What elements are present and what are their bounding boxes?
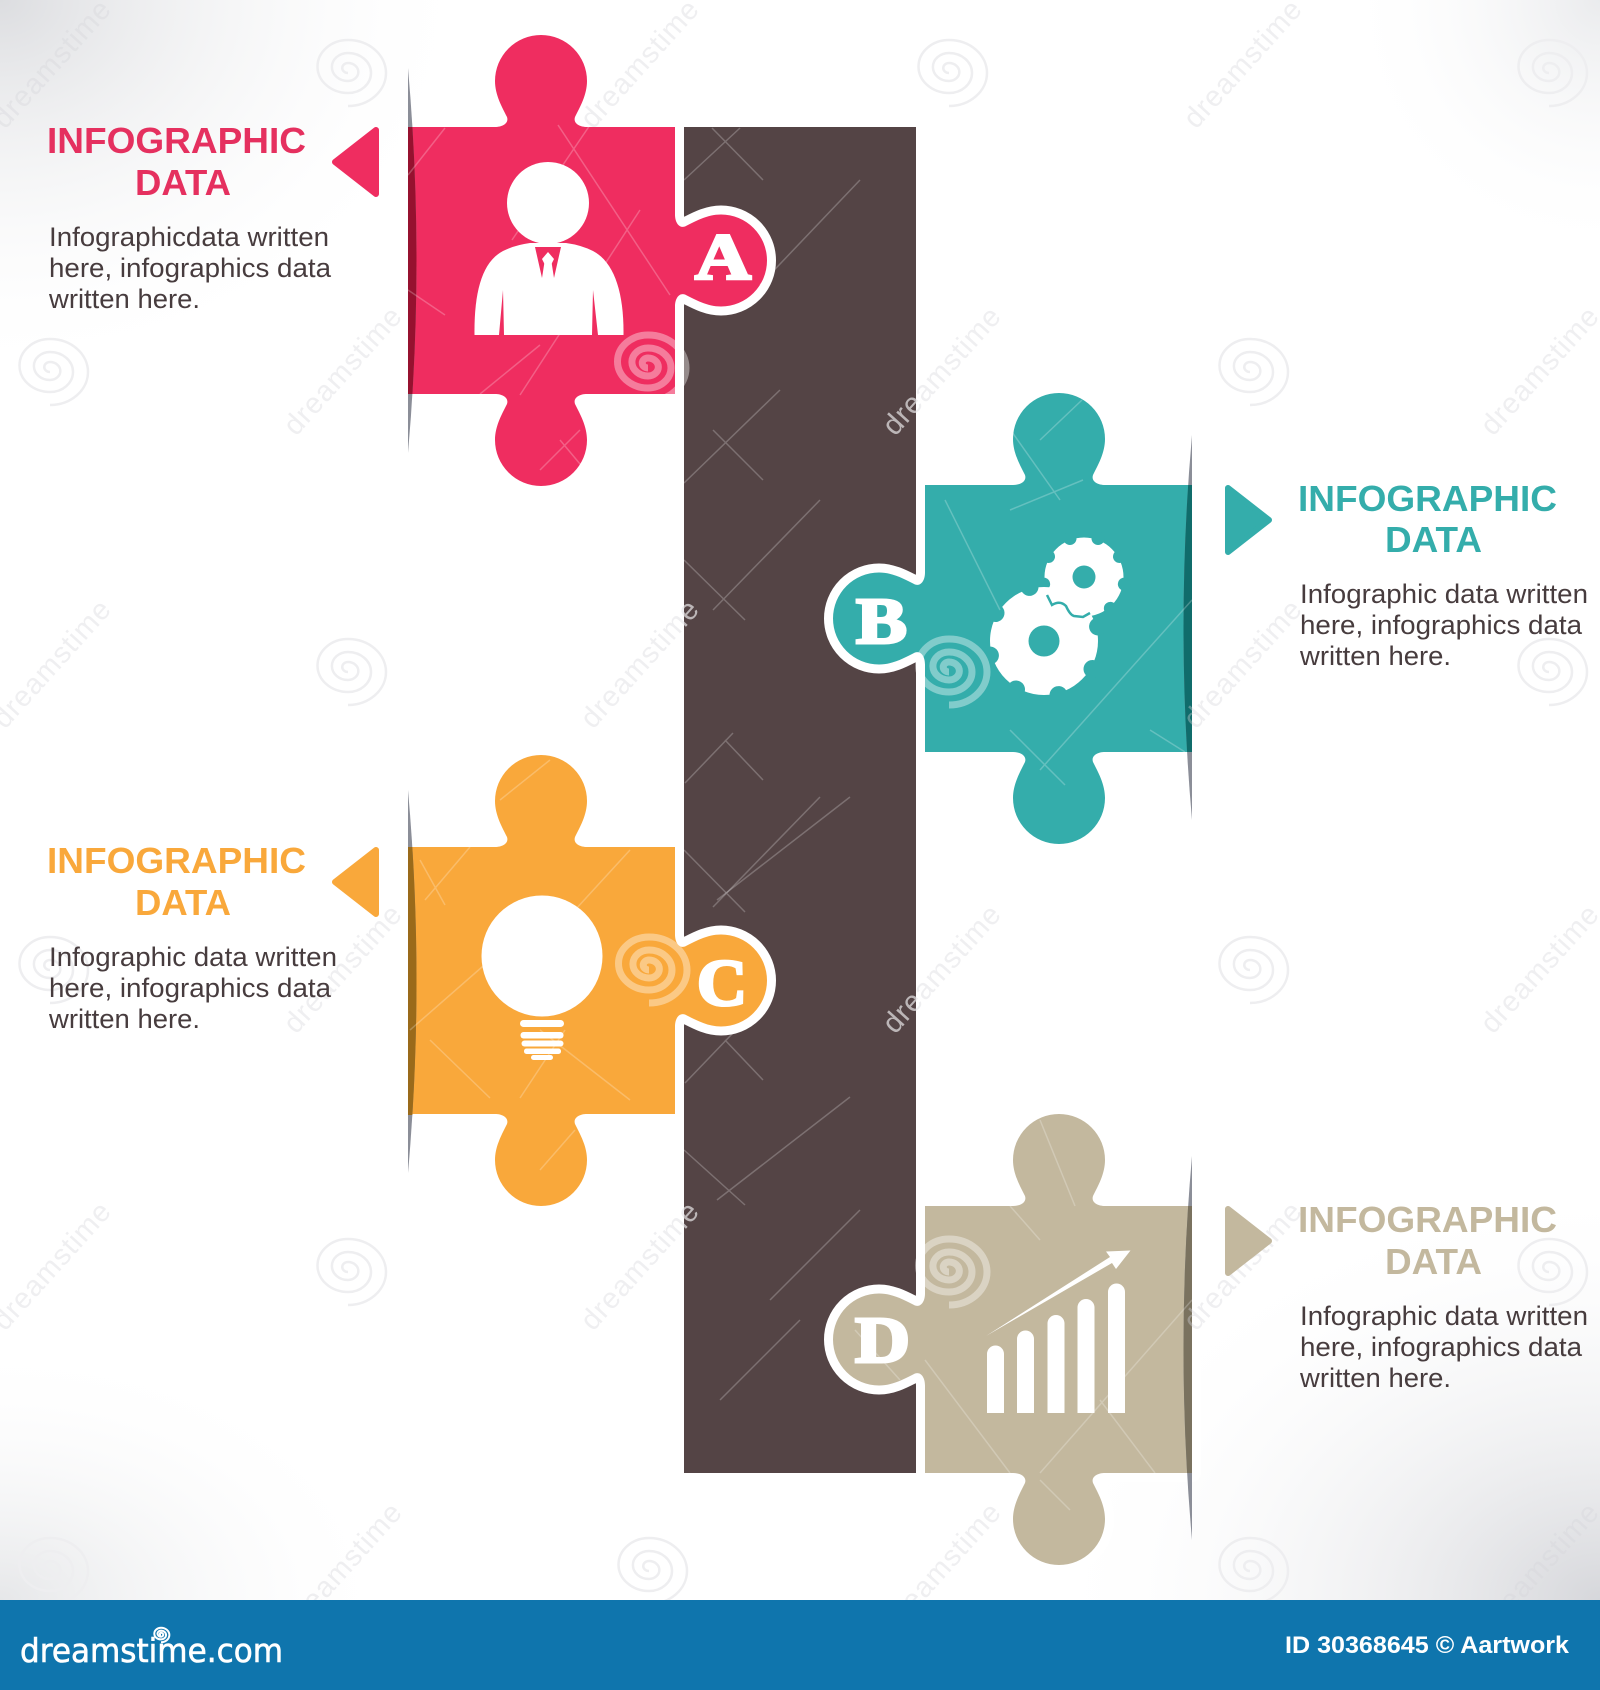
- arrow B: [1228, 488, 1269, 552]
- body C: [48, 942, 337, 1034]
- central brown bar: [684, 127, 916, 1473]
- body C: written here.: [48, 1004, 200, 1034]
- body D: Infographic data written: [1300, 1301, 1588, 1331]
- icon: light bulb: [482, 896, 602, 1060]
- watermark pattern: dreamstime: [876, 300, 1008, 442]
- icon: growth chart: [986, 1250, 1130, 1413]
- panel: piece D: [833, 1114, 1192, 1565]
- fold shadow C: [408, 790, 416, 1173]
- panel: piece B: [833, 393, 1192, 844]
- text block B: [1298, 478, 1588, 671]
- body D: written here.: [1299, 1363, 1451, 1393]
- puzzle piece A: [408, 35, 767, 486]
- body D: here, infographics data: [1300, 1332, 1583, 1362]
- watermark pattern: dreamstime: [277, 300, 409, 442]
- body B: Infographic data written: [1300, 579, 1588, 609]
- puzzle piece D: [833, 1114, 1192, 1565]
- panel: piece C: [408, 755, 767, 1206]
- watermark pattern: dreamstime: [876, 1496, 1008, 1638]
- body B: [1299, 579, 1588, 671]
- body A: Infographicdata written: [49, 222, 329, 252]
- body B: written here.: [1299, 641, 1451, 671]
- letter D: D: [855, 1304, 910, 1377]
- heading D: [1298, 1199, 1557, 1282]
- letter A: A: [695, 221, 751, 294]
- footer band: [0, 1600, 1600, 1690]
- heading C: DATA: [135, 882, 231, 923]
- heading D: DATA: [1385, 1241, 1482, 1282]
- watermark pattern: dreamstime: [876, 898, 1008, 1040]
- footer logo: dreamstime.com: [20, 1631, 283, 1670]
- letter C: C: [697, 947, 747, 1020]
- icon: gears: [979, 530, 1132, 706]
- body C: Infographic data written: [49, 942, 337, 972]
- heading B: DATA: [1385, 519, 1482, 560]
- body A: written here.: [48, 284, 200, 314]
- body B: here, infographics data: [1300, 610, 1583, 640]
- watermark pattern: dreamstime: [574, 593, 706, 735]
- text block A: [47, 120, 332, 314]
- heading A: INFOGRAPHIC: [47, 120, 306, 161]
- watermark pattern: dreamstime: [1177, 1195, 1309, 1337]
- heading B: [1298, 478, 1557, 560]
- arrow D: [1228, 1209, 1269, 1273]
- watermark pattern: dreamstime: [574, 1195, 706, 1337]
- watermark pattern: dreamstime: [277, 1496, 409, 1638]
- text block C: [47, 840, 337, 1034]
- fold shadow B: [1184, 435, 1192, 820]
- body A: here, infographics data: [49, 253, 332, 283]
- heading A: [47, 120, 306, 203]
- fold shadow D: [1184, 1156, 1192, 1540]
- watermark pattern: dreamstime: [876, 300, 1008, 442]
- heading C: INFOGRAPHIC: [47, 840, 306, 881]
- arrow A: [335, 130, 376, 194]
- text block D: [1298, 1199, 1588, 1393]
- watermark pattern: dreamstime: [1177, 593, 1309, 735]
- icon: businessman: [474, 162, 624, 335]
- fold shadow A: [408, 68, 416, 453]
- arrow C: [335, 850, 376, 914]
- watermark pattern: dreamstime: [277, 898, 409, 1040]
- body A: [48, 222, 332, 314]
- body D: [1299, 1301, 1588, 1393]
- heading B: INFOGRAPHIC: [1298, 478, 1557, 519]
- heading C: [47, 840, 306, 923]
- puzzle piece B: [833, 393, 1192, 844]
- heading D: INFOGRAPHIC: [1298, 1199, 1557, 1240]
- heading A: DATA: [135, 162, 231, 203]
- panel: piece A: [408, 35, 767, 486]
- body C: here, infographics data: [49, 973, 332, 1003]
- puzzle piece C: [408, 755, 767, 1206]
- watermark pattern: dreamstime: [574, 1195, 706, 1337]
- footer credit: ID 30368645 © Aartwork: [1285, 1632, 1570, 1659]
- watermark pattern: dreamstime: [876, 898, 1008, 1040]
- letter B: B: [856, 585, 907, 658]
- watermark pattern: dreamstime: [574, 593, 706, 735]
